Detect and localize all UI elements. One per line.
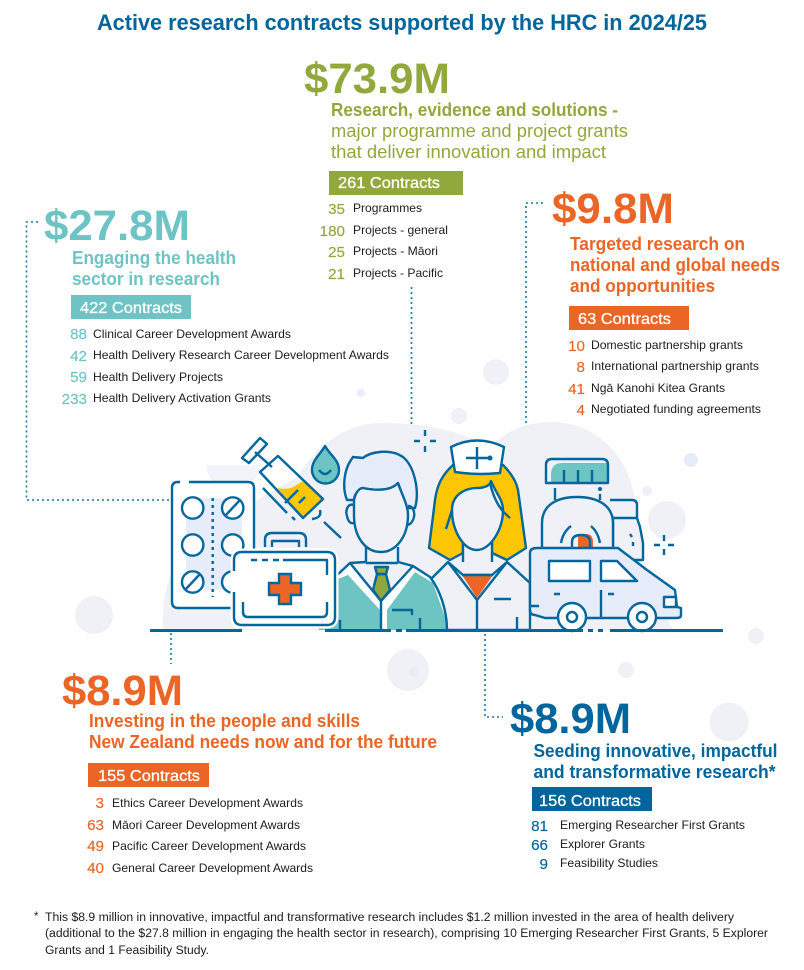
contract list: Health Delivery Projects (93, 370, 223, 384)
heading: major programme and project grants (331, 121, 628, 141)
panel: investing in people and skills (62, 667, 437, 877)
icon: pill pack (172, 482, 254, 608)
contract list (568, 338, 761, 419)
heading: Research, evidence and solutions - (331, 100, 618, 120)
contract list: Negotiated funding agreements (591, 402, 761, 416)
footnote: Grants and 1 Feasibility Study. (45, 945, 209, 957)
contract list: Programmes (353, 201, 422, 215)
contracts badge: 261 Contracts (338, 175, 440, 192)
contract list: 21 (328, 266, 345, 283)
contract list: 63 (87, 817, 104, 834)
heading: sector in research (72, 269, 220, 289)
title: Active research contracts supported by the HRC in 2024/25 (97, 10, 707, 35)
contract list: 180 (320, 223, 345, 240)
contract list: 41 (568, 381, 585, 398)
icon: medicine bottle (542, 459, 643, 560)
heading (570, 234, 780, 296)
connector: left (26, 222, 172, 500)
contract list: 35 (328, 201, 345, 218)
icon: syringe (242, 438, 341, 538)
amount: $8.9M (62, 667, 183, 715)
heading (72, 248, 236, 289)
contract list: 3 (96, 795, 104, 812)
footnote: This $8.9 million in innovative, impactful and transformative research includes $1.2 million invested in the area of health delivery (45, 912, 734, 924)
contract list: Projects - general (353, 223, 448, 237)
contracts badge (532, 787, 652, 811)
heading: New Zealand needs now and for the future (89, 732, 437, 752)
heading: that deliver innovation and impact (331, 142, 606, 162)
heading: national and global needs (570, 255, 780, 275)
contract list: 8 (577, 359, 585, 376)
heading: Targeted research on (570, 234, 745, 254)
illustration: health workers and equipment (150, 422, 723, 631)
contract list (320, 201, 448, 283)
contracts badge (569, 306, 689, 330)
contract list: 40 (87, 860, 104, 877)
amount: $73.9M (304, 55, 450, 103)
contract list: International partnership grants (591, 359, 759, 373)
contract list: 66 (531, 837, 548, 854)
contracts badge: 156 Contracts (539, 793, 641, 810)
contracts badge: 63 Contracts (578, 311, 671, 328)
contract list: 233 (62, 391, 87, 408)
amount: $9.8M (552, 185, 674, 233)
panel: targeted research (552, 185, 780, 419)
contracts badge (329, 171, 463, 195)
figure: nurse (429, 440, 530, 630)
contract list: Emerging Researcher First Grants (560, 818, 745, 832)
contract list: Feasibility Studies (560, 856, 658, 870)
heading: Engaging the health (72, 248, 236, 268)
contract list: Domestic partnership grants (591, 338, 743, 352)
connector: right (526, 203, 543, 432)
contract list: Health Delivery Research Career Development Awards (93, 348, 389, 362)
contract list: 81 (531, 818, 548, 835)
heading: and transformative research* (534, 762, 776, 782)
contract list: Ethics Career Development Awards (112, 796, 303, 810)
background blob (163, 422, 673, 630)
background decorative circles (75, 359, 764, 742)
connector: lower right (485, 634, 503, 717)
panel: engaging the health sector (44, 202, 389, 408)
contracts badge (88, 763, 209, 787)
icon: smile on drop (319, 470, 331, 474)
heading: Seeding innovative, impactful (534, 741, 778, 761)
footnote: * (34, 911, 39, 923)
contract list: 49 (87, 838, 104, 855)
icon: ambulance (530, 526, 681, 631)
contract list (87, 795, 313, 877)
ground line (150, 629, 723, 632)
heading: and opportunities (570, 276, 715, 296)
contract list: 4 (577, 402, 585, 419)
contract list: 59 (70, 369, 87, 386)
contract list (62, 326, 389, 408)
contract list: Health Delivery Activation Grants (93, 391, 271, 405)
heading (89, 711, 437, 752)
icon: sparkle right (654, 535, 674, 555)
footnote: (additional to the $27.8 million in engaging the health sector in research), comprising 10 Emerging Researcher First Grants, 5 Explorer (45, 928, 768, 940)
contract list: Māori Career Development Awards (112, 818, 300, 832)
icon: sparkle (414, 430, 436, 452)
panel: research, evidence and solutions (304, 55, 628, 283)
contract list: 9 (540, 856, 548, 873)
connector: centre (410, 287, 412, 424)
heading (331, 100, 628, 162)
amount: $8.9M (510, 695, 631, 743)
icon: first aid kit (234, 533, 335, 625)
contracts badge: 155 Contracts (98, 768, 200, 785)
contract list: Projects - Pacific (353, 266, 443, 280)
contracts badge (71, 295, 191, 319)
contract list: Explorer Grants (560, 837, 645, 851)
contract list: General Career Development Awards (112, 861, 313, 875)
contract list: Projects - Māori (353, 244, 438, 258)
heading (534, 741, 778, 782)
connector: lower left (170, 633, 172, 664)
contract list (531, 818, 745, 873)
contract list: Ngā Kanohi Kitea Grants (591, 381, 725, 395)
contract list: 88 (70, 326, 87, 343)
contract list: 25 (328, 244, 345, 261)
contract list: 10 (568, 338, 585, 355)
contract list: Pacific Career Development Awards (112, 839, 306, 853)
icon: drop (312, 446, 339, 484)
contract list: Clinical Career Development Awards (93, 327, 291, 341)
footnote (34, 911, 768, 957)
contract list: 42 (70, 348, 87, 365)
contracts badge: 422 Contracts (80, 300, 182, 317)
amount: $27.8M (44, 202, 190, 250)
figure: doctor (318, 452, 447, 630)
panel: seeding innovative research (510, 695, 778, 873)
heading: Investing in the people and skills (89, 711, 360, 731)
